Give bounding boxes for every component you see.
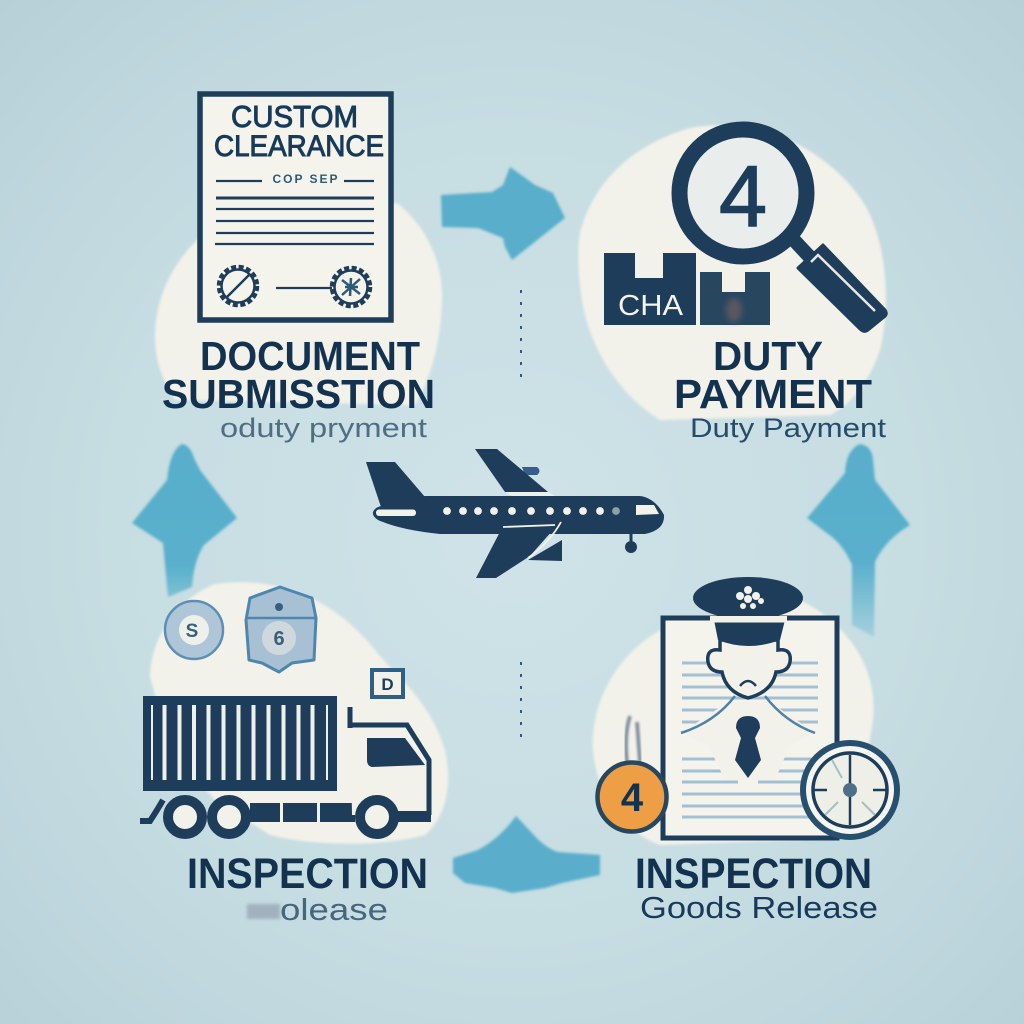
icon: coin: S [186, 621, 198, 642]
shipping container [143, 696, 337, 791]
truck chassis [250, 803, 355, 822]
icon: coin [165, 601, 223, 659]
document subtitle: CLEARANCE [214, 130, 384, 163]
document title: CUSTOM [231, 99, 358, 134]
panel background blob [150, 582, 448, 844]
icon: small label D [372, 670, 403, 697]
icon: orange number badge [598, 762, 666, 832]
heading: inspection: INSPECTION [635, 850, 872, 898]
icon: small label D: D [381, 675, 394, 694]
icon: left seal [219, 267, 257, 305]
heading: document submission: SUBMISSTION [162, 371, 435, 417]
icon: customs officer [681, 577, 815, 780]
icon: badge strap [626, 716, 640, 762]
plane engine [522, 467, 540, 475]
caption: release [247, 892, 388, 927]
icon: lock badge: 6 [273, 628, 285, 650]
plane windows [443, 507, 620, 515]
caption: goods release: Goods Release [640, 890, 878, 925]
panel: duty payment [578, 125, 887, 443]
number in lens: 4 [719, 149, 767, 245]
officer shirt [681, 702, 815, 780]
caption: release: olease [280, 892, 388, 927]
arrow: right, duty payment upward [807, 444, 910, 637]
arrow: left, inspection to document [132, 444, 237, 597]
heading: document submission: DOCUMENT [200, 333, 420, 379]
icon: report sheet [663, 618, 837, 838]
icon: lock badge [246, 587, 316, 672]
caption: duty payment: Duty Payment [690, 413, 887, 443]
plane landing gear [630, 534, 632, 544]
panel: inspection with truck [140, 582, 448, 927]
panel: inspection and goods release [593, 577, 897, 925]
officer hat [693, 577, 803, 619]
plane bottom wing [476, 522, 560, 578]
icon: orange number badge: 4 [621, 776, 644, 820]
officer tie [735, 716, 761, 778]
icon: second cargo box [700, 272, 770, 325]
heading: duty payment: PAYMENT [674, 371, 872, 417]
heading: duty payment: DUTY [713, 333, 823, 379]
icon: cargo box labelled CHA [604, 253, 696, 325]
caption: duty payment: oduty pryment [220, 413, 428, 443]
truck cab [350, 707, 428, 815]
truck wheels [168, 800, 394, 834]
plane rear stabilizer [528, 540, 562, 561]
arrow: top, document to duty [441, 167, 565, 260]
heading: inspection: INSPECTION [187, 850, 428, 898]
icon: magnifying glass [680, 130, 886, 331]
heading: duty payment [674, 333, 872, 417]
plane cockpit window [636, 505, 659, 515]
heading: document submission [162, 333, 435, 417]
officer face [708, 640, 790, 698]
plane tail stripe [376, 510, 416, 516]
icon: customs document [200, 94, 391, 320]
box label: CHA [618, 290, 684, 322]
icon: cargo truck [140, 696, 431, 834]
icon: clock [803, 743, 897, 837]
panel background blob [593, 600, 874, 845]
dotted connector: top [520, 290, 522, 378]
panel background blob [155, 203, 442, 405]
icon: right seal [332, 268, 370, 306]
plane tail fin [366, 462, 425, 510]
arrow: bottom, between inspection panels [453, 816, 600, 893]
panel: document submission [155, 94, 442, 443]
panel background blob [578, 125, 886, 420]
icon: airplane [366, 449, 664, 578]
plane top wing [475, 449, 548, 492]
plane fuselage [373, 496, 664, 534]
document small label: COP SEP [272, 172, 338, 186]
dotted connector: bottom [520, 662, 522, 745]
